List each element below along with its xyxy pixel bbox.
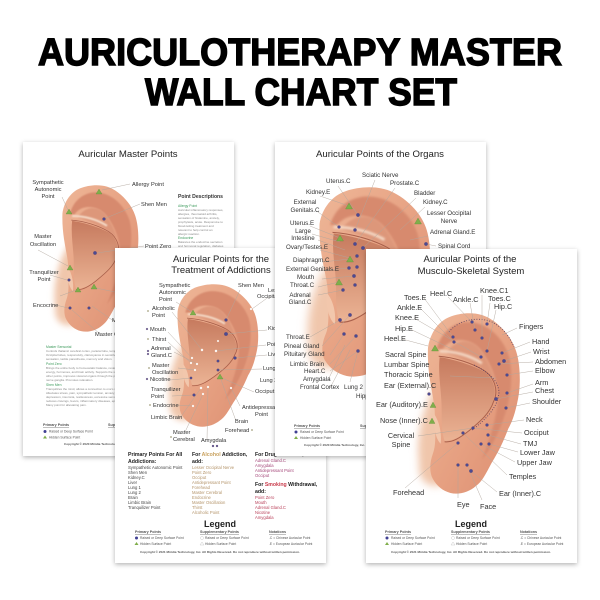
panel: treatment of addictions: [115, 248, 326, 563]
legend: addictions: Supplementary Points: [200, 530, 239, 534]
labels: addictions: Gland.C: [151, 353, 172, 359]
legend: organs: Copyright © 2020 Miridia Technology, Inc. All Rights Reserved.: [304, 443, 396, 447]
legend: musculo-skeletal: Supplementary Points: [451, 530, 490, 534]
column: alcohol addiction: Occiput: [192, 475, 207, 480]
panel title: master points: Auricular Master Points: [78, 149, 178, 160]
panel title: musculo-skeletal: [418, 254, 524, 277]
labels: organs: Prostate.C: [390, 180, 420, 187]
column: alcohol addiction: Master Cerebral: [192, 490, 222, 495]
labels: addictions: Limbic Brain: [151, 415, 182, 421]
panel title: musculo-skeletal: Auricular Points of the: [424, 254, 516, 265]
labels: organs: Throat.E: [286, 334, 310, 341]
legend: addictions: Notations: [269, 530, 286, 534]
labels: organs: Ovary/Testes.E: [286, 244, 328, 251]
point descriptions sidebar: sensation, tactile paresthesia, memory and vision.: [46, 357, 113, 361]
legend: musculo-skeletal: Primary Points: [385, 530, 411, 534]
legend: musculo-skeletal: Hidden Surface Point: [456, 542, 487, 546]
legend: master points: [43, 423, 156, 446]
labels: master points: Allergy Point: [132, 182, 164, 188]
point descriptions sidebar: [46, 194, 224, 407]
column: drug and smoking withdrawal: For Smoking Withdrawal,: [255, 482, 318, 488]
legend: master points: Hidden Surface Point: [49, 436, 80, 440]
column: drug and smoking withdrawal: Antidepressant Point: [255, 468, 294, 473]
labels: addictions: Brain: [235, 419, 248, 425]
labels: organs: Spinal Cord: [438, 243, 471, 250]
column: alcohol addiction: [192, 452, 248, 515]
column: drug and smoking withdrawal: Occiput: [255, 473, 270, 478]
labels: addictions: Point: [159, 297, 172, 303]
point descriptions sidebar: Controls thalamic cerebral cortex, parietal lobe, temporal lobe.: [46, 349, 129, 353]
labels: musculo-skeletal: Occiput: [524, 428, 549, 437]
column: primary points for all addictions: Shen Men: [128, 470, 148, 475]
panel: auricular master points: [23, 142, 234, 456]
labels: addictions: Shen Men: [238, 283, 264, 289]
point descriptions sidebar: and hormonal regulation, diabetes: [178, 244, 224, 248]
column: drug and smoking withdrawal: Point Zero: [255, 495, 275, 500]
labels: addictions: Sympathetic: [159, 283, 190, 289]
labels: addictions: Oscillation: [152, 370, 178, 376]
labels: addictions: Occiput: [255, 389, 275, 395]
labels: organs: Sciatic Nerve: [362, 172, 399, 179]
leader lines: addictions: [168, 290, 270, 440]
panel title: musculo-skeletal: Musculo-Skeletal System: [418, 266, 524, 277]
labels: musculo-skeletal: Hand: [532, 337, 549, 346]
panel: musculo-skeletal system: [366, 249, 577, 563]
column: primary points for all addictions: Addictions:: [128, 459, 157, 465]
labels: master points: Oscillation: [30, 242, 56, 248]
column: drug and smoking withdrawal: add:: [255, 489, 266, 495]
labels: addictions: Occipital: [257, 294, 279, 300]
column: primary points for all addictions: Lung 2: [128, 490, 141, 495]
labels: addictions: Kidney: [268, 326, 286, 332]
labels: musculo-skeletal: Ear (Auditory).E: [376, 400, 428, 409]
labels: organs: Adrenal Gland.E: [430, 229, 475, 236]
labels: musculo-skeletal: Knee.E: [395, 313, 419, 322]
labels: organs: Gland.C: [289, 299, 312, 306]
legend: musculo-skeletal: Legend: [455, 519, 487, 529]
column: drug and smoking withdrawal: Adrenal Gland.C: [255, 505, 286, 510]
labels: musculo-skeletal: Eye: [457, 500, 470, 509]
legend: musculo-skeletal: .C = Chinese Auricular Point: [520, 536, 561, 540]
labels: organs: Kidney.C: [423, 199, 448, 206]
labels: organs: Kidney.E: [306, 189, 330, 196]
labels: musculo-skeletal: Temples: [509, 472, 537, 481]
leader lines: musculo-skeletal: [402, 295, 533, 500]
legend: organs: Raised or Deep Surface Point: [300, 430, 344, 434]
labels: addictions: Lung 2: [260, 378, 277, 384]
point descriptions sidebar: blood-letting treatment and: [178, 224, 214, 228]
legend: addictions: Legend: [204, 519, 236, 529]
column: alcohol addiction: Alcoholic Point: [192, 510, 220, 515]
column: drug and smoking withdrawal: [255, 452, 318, 520]
column: alcohol addiction: Antidepressant Point: [192, 480, 231, 485]
ear illustration: organs: [308, 187, 430, 377]
labels: addictions: Autonomic: [159, 290, 186, 296]
leader lines: organs: [310, 180, 436, 388]
labels: musculo-skeletal: Hip.C: [494, 302, 512, 311]
column: primary points for all addictions: Liver: [128, 480, 138, 485]
point descriptions sidebar: Tranquilizes the mind, allows a connection to one's spirit.: [46, 387, 122, 391]
labels: organs: Hippocampus: [356, 393, 394, 400]
point descriptions sidebar: Master Sensorial: [46, 345, 72, 349]
labels: musculo-skeletal: Fingers: [519, 322, 544, 331]
legend: musculo-skeletal: .E = European Auricular Point: [520, 542, 563, 546]
legend: master points: Primary Points: [43, 423, 69, 427]
point descriptions sidebar: Alleviates stress, pain, sympathetic tension, anxiety,: [46, 391, 115, 395]
points: addictions: [146, 308, 253, 447]
labels: musculo-skeletal: Ear (Inner).C: [499, 489, 541, 498]
column: drug and smoking withdrawal: Nicotine: [255, 510, 271, 515]
panel: points of the organs: [275, 142, 486, 456]
labels: musculo-skeletal: Thoracic Spine: [384, 370, 433, 379]
point descriptions sidebar: Shen Men: [46, 383, 62, 387]
legend: master points: Raised or Deep Surface Point: [49, 430, 93, 434]
labels: addictions: Point Zero: [267, 342, 293, 348]
labels: master points: Master Cerebral: [95, 332, 136, 338]
points: master points: [66, 189, 106, 309]
column: primary points for all addictions: [128, 452, 183, 510]
labels: addictions: Forehead: [225, 428, 249, 434]
labels: addictions: Nicotine: [150, 377, 171, 383]
legend: addictions: [134, 519, 312, 554]
title: [38, 32, 562, 114]
column: drug and smoking withdrawal: For Drug Addiction,: [255, 452, 304, 458]
point descriptions sidebar: energy, hormones, and brain activity. Supports the spinal: [46, 370, 122, 374]
legend: organs: Hidden Surface Point: [300, 436, 331, 440]
column: alcohol addiction: Point Zero: [192, 470, 212, 475]
labels: musculo-skeletal: Hip.E: [395, 324, 413, 333]
labels: master points: Master: [112, 318, 129, 324]
column: primary points for all addictions: Tranquilizer Point: [128, 505, 161, 510]
column: alcohol addiction: Thirst: [192, 505, 203, 510]
labels: master points: Tranquilizer: [29, 270, 59, 276]
labels: addictions: Lung 1: [263, 366, 280, 372]
labels: master points: Sympathetic: [32, 180, 64, 186]
column: drug and smoking withdrawal: Amygdala: [255, 515, 274, 520]
legend: master points: Supplementary: [108, 423, 136, 427]
labels: musculo-skeletal: Wrist: [533, 347, 549, 356]
legend: addictions: Raised or Deep Surface Point: [140, 536, 184, 540]
title: WALL CHART SET: [145, 72, 457, 114]
labels: musculo-skeletal: TMJ: [523, 439, 538, 448]
labels: master points: Encocrine: [33, 303, 58, 309]
legend: addictions: Primary Points: [135, 530, 161, 534]
point descriptions sidebar: Many point for alleviating pain.: [46, 403, 87, 407]
labels: addictions: Amygdala: [201, 438, 227, 444]
legend: organs: [294, 424, 396, 447]
point descriptions sidebar: Occipital lobes, responsivity, clairvoyance in sensitive: [46, 353, 117, 357]
legend: addictions: Hidden Surface Point: [140, 542, 171, 546]
labels: organs: Genitals.C: [291, 207, 320, 214]
panel title: organs: Auricular Points of the Organs: [316, 149, 444, 160]
point descriptions sidebar: depression, insomnia, restlessness, excessive sensitivity,: [46, 395, 122, 399]
column: alcohol addiction: Master Oscillation: [192, 500, 226, 505]
point descriptions sidebar: Point Descriptions: [178, 194, 223, 200]
labels: organs: [284, 172, 475, 400]
leader lines: master points: [38, 184, 144, 334]
labels: musculo-skeletal: Chest: [535, 386, 554, 395]
labels: organs: Lesser Occipital: [427, 210, 471, 217]
labels: musculo-skeletal: Upper Jaw: [517, 458, 553, 467]
legend: musculo-skeletal: Raised or Deep Surface Point: [391, 536, 435, 540]
column: alcohol addiction: Lesser Occipital Nerve: [192, 465, 235, 470]
labels: musculo-skeletal: Neck: [526, 415, 543, 424]
column: alcohol addiction: add:: [192, 459, 203, 465]
point descriptions sidebar: sensation of histamine, anxiety,: [178, 216, 220, 220]
column: alcohol addiction: Forehead: [192, 485, 211, 490]
labels: musculo-skeletal: Lumbar Spine: [384, 360, 429, 369]
labels: master points: Master: [34, 234, 52, 240]
labels: addictions: [150, 283, 293, 444]
point descriptions sidebar: Allergy Point: [178, 204, 197, 208]
labels: musculo-skeletal: Nose (Inner).C: [380, 416, 428, 425]
point descriptions sidebar: Balances the endocrine secretion: [178, 240, 223, 244]
legend: master points: Copyright © 2020 Miridia Technology, Inc. All Rights Reserved.: [64, 442, 156, 446]
legend: musculo-skeletal: [385, 519, 563, 554]
ear illustration: master points: [54, 185, 138, 332]
labels: addictions: Liver: [268, 352, 280, 358]
point descriptions sidebar: other points, improves visceral organs through the peripheral: [46, 374, 127, 378]
points: musculo-skeletal: [428, 320, 508, 473]
labels: organs: Pituitary Gland: [284, 351, 325, 358]
point descriptions sidebar: nerve ganglia. Promotes relaxation.: [46, 378, 93, 382]
labels: musculo-skeletal: Elbow: [535, 366, 556, 375]
labels: addictions: Thirst: [152, 337, 167, 343]
point descriptions sidebar: Brings the entire body to homeostatic balance, restores: [46, 366, 120, 370]
legend: musculo-skeletal: Raised or Deep Surface Point: [456, 536, 500, 540]
labels: addictions: Tranquilizer: [151, 387, 181, 393]
labels: addictions: Lesser: [268, 288, 285, 294]
dotted antihelix line: [449, 319, 514, 430]
column: alcohol addiction: Endocrine: [192, 495, 212, 500]
labels: musculo-skeletal: Ear (External).C: [384, 381, 436, 390]
labels: organs: Adrenal: [289, 292, 311, 299]
point descriptions sidebar: Auricular inflammatory responses,: [178, 208, 224, 212]
column: primary points for all addictions: Primary Points For All: [128, 452, 183, 458]
labels: musculo-skeletal: Face: [480, 502, 496, 511]
column: alcohol addiction: For Alcohol Addiction,: [192, 452, 248, 458]
labels: musculo-skeletal: Toes.E: [404, 293, 426, 302]
labels: musculo-skeletal: Sacral Spine: [385, 350, 426, 359]
labels: organs: Intestine: [291, 235, 315, 242]
labels: addictions: Alcoholic: [152, 306, 175, 312]
ear illustration: musculo-skeletal: [418, 313, 520, 494]
panel title: addictions: Treatment of Addictions: [171, 265, 271, 276]
column: primary points for all addictions: Brain: [128, 495, 138, 500]
labels: organs: Bladder: [414, 190, 435, 197]
labels: addictions: Cerebral: [173, 437, 195, 443]
labels: musculo-skeletal: Spine: [392, 440, 410, 449]
column: drug and smoking withdrawal: Adrenal Gland.C: [255, 458, 286, 463]
labels: musculo-skeletal: Toes.C: [488, 294, 511, 303]
legend: organs: Primary Points: [294, 424, 320, 428]
labels: organs: Pineal Gland: [284, 343, 320, 350]
labels: addictions: Master: [173, 430, 190, 436]
labels: addictions: Mouth: [150, 327, 166, 333]
labels: musculo-skeletal: Abdomen: [535, 357, 566, 366]
labels: addictions: Point: [152, 313, 165, 319]
labels: master points: Point Zero: [145, 244, 171, 250]
labels: addictions: Adrenal: [151, 346, 171, 352]
column: primary points for all addictions: Kidney.C: [128, 475, 145, 480]
legend: musculo-skeletal: Copyright © 2021 Miridia Technology, Inc. All Rights Reserved. Do not reproduce without written permission.: [391, 550, 551, 554]
legend: addictions: Hidden Surface Point: [205, 542, 236, 546]
labels: musculo-skeletal: Cervical: [388, 431, 415, 440]
legend: addictions: .C = Chinese Auricular Point: [269, 536, 310, 540]
panel title: addictions: [171, 254, 271, 276]
labels: musculo-skeletal: Forehead: [393, 488, 424, 497]
labels: master points: Autonomic: [35, 187, 62, 193]
labels: addictions: Point: [151, 394, 164, 400]
labels: addictions: Endocrine: [153, 403, 179, 409]
labels: addictions: Point: [255, 412, 268, 418]
legend: musculo-skeletal: Hidden Surface Point: [391, 542, 422, 546]
point descriptions sidebar: Endocrine: [178, 236, 193, 240]
labels: organs: Lung 2: [344, 384, 363, 391]
column: drug and smoking withdrawal: Amygdala: [255, 463, 274, 468]
labels: addictions: Master: [152, 363, 169, 369]
labels: master points: [29, 180, 171, 338]
title: AURICULOTHERAPY MASTER: [38, 32, 562, 74]
labels: master points: Point: [38, 277, 51, 283]
legend: addictions: Raised or Deep Surface Point: [205, 536, 249, 540]
labels: organs: Mouth: [297, 274, 315, 281]
labels: musculo-skeletal: Lower Jaw: [520, 448, 556, 457]
column: primary points for all addictions: Limbic Brain: [128, 500, 152, 505]
ear illustration: addictions: [169, 284, 258, 427]
column: primary points for all addictions: Lung 1: [128, 485, 141, 490]
column: drug and smoking withdrawal: Mouth: [255, 500, 267, 505]
point descriptions sidebar: allergic reaction.: [178, 232, 200, 236]
labels: organs: External Genitals.E: [286, 266, 339, 273]
labels: organs: Nerve: [441, 218, 458, 225]
labels: organs: External: [294, 199, 316, 206]
labels: master points: Point: [42, 194, 55, 200]
labels: organs: Uterus.C: [326, 178, 351, 185]
points: organs: [336, 203, 428, 353]
point descriptions sidebar: Point Zero: [46, 362, 62, 366]
labels: musculo-skeletal: Heel.E: [384, 334, 406, 343]
labels: musculo-skeletal: Ankle.C: [453, 295, 479, 304]
point descriptions sidebar: reduces cravings, fevers, inflammatory diseases, epilepsy,: [46, 399, 123, 403]
point descriptions sidebar: allergies, rheumatoid arthritis,: [178, 212, 218, 216]
point descriptions sidebar: relevant to help control an: [178, 228, 213, 232]
labels: organs: Heart.C: [304, 368, 326, 375]
labels: organs: Large: [295, 228, 311, 235]
labels: musculo-skeletal: [376, 286, 566, 511]
labels: organs: Diaphragm.C: [293, 257, 330, 264]
point descriptions sidebar: prophylaxis, acute. Responsive to: [178, 220, 223, 224]
labels: addictions: Antidepressant: [242, 405, 280, 411]
panel title: addictions: Auricular Points for the: [173, 254, 269, 265]
labels: musculo-skeletal: Ankle.E: [397, 303, 422, 312]
legend: musculo-skeletal: Notations: [520, 530, 537, 534]
labels: musculo-skeletal: Arm: [535, 378, 548, 387]
labels: master points: Shen Men: [141, 202, 167, 208]
labels: organs: Uterus.E: [290, 220, 314, 227]
labels: organs: Limbic Brain: [290, 361, 325, 368]
column: primary points for all addictions: Sympathetic Autonomic Point: [128, 465, 183, 470]
labels: musculo-skeletal: Knee.C1: [480, 286, 508, 295]
labels: musculo-skeletal: Shoulder: [532, 397, 562, 406]
labels: organs: Amygdala: [303, 376, 331, 383]
labels: organs: Frontal Cortex: [300, 384, 340, 391]
legend: addictions: .E = European Auricular Point: [269, 542, 312, 546]
legend: organs: Supplementary: [360, 424, 388, 428]
labels: organs: Throat.C: [290, 282, 315, 289]
labels: musculo-skeletal: Heel.C: [430, 289, 452, 298]
legend: addictions: Copyright © 2021 Miridia Technology, Inc. All Rights Reserved. Do not reproduce without written permission.: [140, 550, 300, 554]
